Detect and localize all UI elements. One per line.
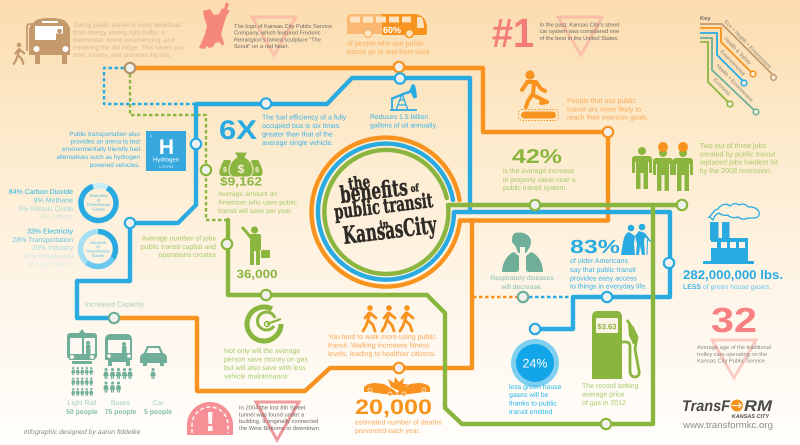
logo: TransFORM bbox=[682, 398, 773, 430]
stat: jobs: 36,000 bbox=[236, 267, 278, 281]
text: exercise: reach their exercise goals. bbox=[567, 114, 649, 122]
icon: lungs bbox=[502, 232, 543, 272]
icon: elderly couple bbox=[621, 224, 651, 255]
text: gas list: 9% Methane bbox=[34, 196, 73, 204]
icon: yield triangle bbox=[558, 17, 602, 55]
stat: savings: $9,162 bbox=[220, 174, 262, 188]
panel: commute share bbox=[347, 14, 432, 56]
logo: TransFORM: www.transformkc.org bbox=[682, 420, 773, 430]
panel: gas price bbox=[582, 311, 639, 407]
icon: tunnel arch bbox=[187, 402, 233, 435]
donut: overview bbox=[75, 179, 122, 227]
icon: runner bbox=[518, 70, 558, 120]
text: savings: Average amount an bbox=[218, 191, 277, 198]
text: maintenance: but will also save with less bbox=[224, 364, 306, 372]
text: source list: 8% Agriculture bbox=[28, 260, 73, 268]
text: gas price: The record setting bbox=[582, 382, 639, 390]
panel: jobs replaced bbox=[632, 141, 778, 191]
logo: TransFORM: KANSAS CITY bbox=[732, 414, 770, 420]
text: hydrogen: environmentally friendly fuel bbox=[62, 146, 140, 153]
stat: trolley: 32 bbox=[711, 301, 757, 340]
text: hydrogen: Public transportation also bbox=[69, 131, 140, 138]
text: tunnel: In 2004 the lost 8th Street bbox=[239, 404, 306, 412]
text: reduction: transit emitted bbox=[509, 409, 552, 416]
panel: logo history bbox=[199, 2, 332, 55]
text: efficiency: average single vehicle. bbox=[262, 139, 333, 147]
icon: commuter with case bbox=[241, 226, 270, 265]
text: hydrogen: powered vehicles. bbox=[90, 162, 140, 169]
text: hydrogen: alternatives such as hydrogen bbox=[56, 154, 140, 161]
panel: walking bbox=[328, 305, 436, 358]
legend: key: Economic bbox=[712, 77, 732, 98]
text: exercise: People that use public bbox=[567, 97, 636, 105]
credit: infographic designed by aaron fiddelke bbox=[24, 429, 141, 436]
text: gas list: 2% Others bbox=[40, 213, 73, 221]
icon: periodic tile: H bbox=[159, 136, 174, 159]
panel: fuel efficiency bbox=[219, 114, 347, 147]
text: capacity heading: Increased Capacity. bbox=[85, 302, 145, 308]
text: deaths: prevented each year. bbox=[355, 427, 420, 435]
logo: TransFORM: RM bbox=[744, 398, 773, 415]
capacity labels: Car bbox=[152, 400, 164, 407]
text: savings: American who uses public bbox=[218, 200, 298, 206]
text: walking: transit. Walking increases fitness bbox=[328, 342, 430, 350]
text: tunnel: tunnel was found under a bbox=[239, 412, 305, 418]
text: commute: of people who use public bbox=[347, 40, 425, 48]
icon: money bags: $ bbox=[255, 166, 259, 174]
panel: capacity bbox=[66, 302, 172, 416]
legend: key: Health & Safety bbox=[723, 36, 752, 67]
text: gas price: average price bbox=[582, 390, 625, 398]
panel: vehicle maintenance bbox=[224, 307, 309, 380]
legend: key: Environmental bbox=[719, 49, 746, 77]
donut label: overview: Greenhouse bbox=[87, 202, 111, 207]
title: in bbox=[379, 219, 390, 231]
panel: property value bbox=[503, 146, 576, 192]
panel: exercise bbox=[518, 70, 649, 122]
chart: greenhouse gas sources bbox=[12, 228, 116, 268]
text: street car: of the best in the United States. bbox=[540, 35, 619, 42]
donut label: overview: Gases bbox=[92, 206, 105, 212]
panel: number one bbox=[492, 10, 620, 56]
text: jobs replaced: by the 2008 recession. bbox=[700, 166, 772, 175]
text: walking: You tend to walk more using public bbox=[328, 333, 436, 341]
text: reduction: gases will be bbox=[509, 392, 549, 399]
text: source list bbox=[12, 228, 73, 268]
text: older: provides easy access bbox=[570, 274, 637, 282]
text: exercise: transit are more likely to bbox=[567, 106, 641, 114]
text: hydrogen: provides an arena to test bbox=[71, 138, 140, 146]
text: savings: transit will save per year. bbox=[218, 208, 293, 215]
icon: light rail passengers bbox=[71, 367, 93, 396]
icon: periodic tile: Hydrogen bbox=[153, 156, 179, 164]
legend: key: Health + Environment bbox=[715, 63, 754, 104]
text: property: is the average increase bbox=[503, 168, 574, 175]
icon: oil pump bbox=[390, 85, 417, 110]
title: public bbox=[333, 195, 381, 224]
text: efficiency: The fuel efficiency of a fully bbox=[262, 114, 347, 122]
panel: jobs created bbox=[141, 226, 278, 281]
stat: 6X: 6X bbox=[219, 115, 257, 145]
panel: tunnel bbox=[187, 402, 319, 440]
text: source list: 28% Transportation bbox=[12, 236, 73, 244]
text: bus savings: replacing the old fridge. This saves you bbox=[73, 44, 184, 52]
text: commute: transit go to and from work. bbox=[347, 48, 432, 56]
text: tunnel: the West Bottoms to downtown bbox=[239, 425, 319, 432]
logo: TransFORM: TransF bbox=[682, 398, 730, 415]
text: trolley: trolley cars operating on the bbox=[697, 351, 767, 358]
text: tunnel: building. It originally connected bbox=[239, 418, 318, 425]
text: deaths: estimated number of deaths bbox=[355, 418, 442, 426]
text: maintenance: person save money on gas bbox=[224, 356, 309, 364]
icon: walkers bbox=[363, 305, 413, 331]
icon: car crash bbox=[364, 377, 430, 396]
text: efficiency: occupied bus is six times bbox=[262, 122, 340, 130]
text: property: in property value near a bbox=[503, 177, 576, 184]
capacity labels: Light Rail bbox=[68, 400, 97, 407]
text: street car: In the past, Kansas City's street bbox=[540, 22, 620, 28]
donut label: sources: Greenhouse bbox=[86, 248, 110, 254]
text: gas price: of gas in 2012 bbox=[582, 399, 626, 407]
panel: trolley age bbox=[697, 301, 771, 378]
text: reduction: less green house bbox=[509, 384, 562, 391]
text: bus savings: time, money, and prevents injuries. bbox=[73, 52, 172, 59]
text: jobs replaced: Two out of three jobs bbox=[700, 141, 767, 150]
text: efficiency: greater than that of the bbox=[262, 130, 333, 138]
text: source list: 11% Residential bbox=[23, 252, 73, 260]
panel: savings bbox=[218, 152, 298, 215]
donut label: overview: Overview bbox=[90, 193, 108, 198]
icon: bus bbox=[105, 334, 132, 366]
text: trolley: Average age of the traditional bbox=[697, 344, 771, 351]
title: KansasCity bbox=[341, 210, 439, 250]
icon: yield triangle bbox=[252, 17, 296, 55]
stat: deaths: 20,000 bbox=[355, 396, 432, 419]
chart: greenhouse gases overview bbox=[9, 179, 122, 227]
title: of bbox=[410, 183, 420, 195]
icon: light rail bbox=[67, 329, 97, 364]
title bbox=[333, 172, 439, 250]
text: logo: The logo of Kansas City Public Service bbox=[234, 23, 332, 30]
panel: greenhouse reduction bbox=[509, 339, 562, 416]
text: walking: levels, leading to healthier citizens. bbox=[328, 350, 436, 358]
icon: money bags: $ bbox=[238, 162, 245, 176]
text: jobs: public transit capital and bbox=[141, 243, 216, 251]
icon: periodic tile: 1 bbox=[150, 133, 153, 138]
text: bus savings: thermostat, home weatherizing, and bbox=[73, 37, 175, 44]
text: source list: 20% Industry bbox=[32, 244, 73, 252]
icon: money bags bbox=[219, 152, 263, 177]
text: bus savings: than energy saving light bulbs, a bbox=[73, 30, 165, 36]
text: logo: Company, which featured Frederic bbox=[234, 30, 321, 37]
text: trolley: Kansas City Public Service bbox=[697, 358, 765, 364]
icon: periodic tile: 1.00794 bbox=[159, 164, 174, 169]
capacity labels: Buses bbox=[111, 400, 131, 407]
text: emissions: LESS of green house gases. bbox=[683, 284, 771, 291]
icon: orange bus: 60% bbox=[383, 25, 401, 35]
icon: scout sculpture bbox=[199, 2, 230, 49]
text: older: say that public transit bbox=[570, 266, 636, 274]
title: benefits bbox=[338, 174, 409, 209]
text: jobs: operations creates bbox=[158, 251, 216, 259]
capacity labels: 75 people bbox=[105, 409, 137, 416]
icon: periodic tile bbox=[146, 131, 186, 171]
panel: deaths prevented bbox=[355, 377, 442, 435]
text: jobs replaced: replaced jobs hardest hit bbox=[700, 158, 778, 166]
stat: #1: #1 bbox=[492, 10, 534, 56]
legend: key bbox=[700, 16, 776, 115]
text: oil: gallons of oil annually. bbox=[370, 122, 437, 130]
legend: key: Eco + Health + Environment bbox=[723, 19, 772, 70]
icon: three workers bbox=[632, 142, 693, 191]
text: older: of older Americans bbox=[570, 257, 628, 265]
panel: oil bbox=[370, 85, 437, 130]
text: maintenance: Not only will the average bbox=[224, 347, 300, 355]
panel: older americans bbox=[570, 224, 651, 290]
donut label: sources: of bbox=[96, 244, 101, 249]
icon: car bbox=[140, 346, 167, 366]
icon: spiral gauge bbox=[247, 307, 281, 341]
capacity labels bbox=[66, 400, 172, 416]
panel: hydrogen bbox=[56, 131, 186, 171]
text: bus savings: Taking public transit is more beneficial bbox=[73, 22, 181, 29]
text: gas list: 84% Carbon Dioxide bbox=[9, 188, 73, 196]
text: older: to things in everyday life. bbox=[570, 282, 647, 290]
text: maintenance: vehicle maintenance. bbox=[224, 372, 290, 380]
icon: yield triangle bbox=[712, 340, 756, 378]
icon: bus passengers bbox=[103, 368, 133, 393]
panel: bus savings bbox=[14, 18, 184, 64]
donut label: overview: of bbox=[97, 198, 101, 202]
legend: key: Key bbox=[700, 16, 711, 22]
text: respiratory: will decrease. bbox=[500, 284, 543, 291]
donut label: sources: Sources bbox=[90, 240, 106, 245]
icon: gas pump: $3.63 bbox=[598, 322, 616, 331]
transit line network bbox=[77, 68, 682, 424]
icon: yield triangle bbox=[256, 402, 299, 440]
panel: respiratory bbox=[490, 232, 554, 291]
stat: older: 83% bbox=[570, 237, 620, 258]
capacity labels: 5 people bbox=[144, 409, 172, 416]
panel: emissions bbox=[683, 204, 783, 291]
text: logo: Remington's famed sculpture "The bbox=[234, 36, 321, 43]
title: transit bbox=[382, 188, 435, 218]
text: source list: 33% Electricity bbox=[27, 228, 73, 236]
text: gas list bbox=[9, 188, 73, 221]
icon: bus and pedestrian bbox=[14, 18, 70, 64]
text: gas list: 5% Nitrous Oxide bbox=[19, 205, 73, 213]
text: jobs: Average number of jobs bbox=[142, 234, 216, 242]
capacity labels: 50 people bbox=[66, 409, 98, 416]
donut: sources bbox=[80, 232, 116, 266]
icon: money bags: $ bbox=[223, 166, 227, 174]
stat: property: 42% bbox=[512, 146, 562, 168]
text: oil: Reduces 1.5 billion bbox=[370, 114, 428, 121]
text: logo: Scout" on a red heart. bbox=[234, 43, 290, 50]
map stations bbox=[109, 62, 687, 429]
text: reduction: thanks to public bbox=[509, 400, 557, 408]
icon: factory bbox=[703, 204, 759, 264]
stat: emissions: 282,000,000 lbs. bbox=[683, 268, 783, 282]
text: street car: car system was considered one bbox=[540, 28, 619, 35]
text: jobs replaced: created by public transit bbox=[700, 150, 775, 158]
icon: percent bubble: 24% bbox=[522, 356, 548, 370]
title: the bbox=[347, 172, 372, 195]
text: respiratory: Respiratory diseases bbox=[490, 275, 554, 282]
icon: car passenger bbox=[150, 368, 156, 379]
donut label: sources: Gases bbox=[92, 253, 104, 258]
text: property: public transit system. bbox=[503, 185, 567, 192]
